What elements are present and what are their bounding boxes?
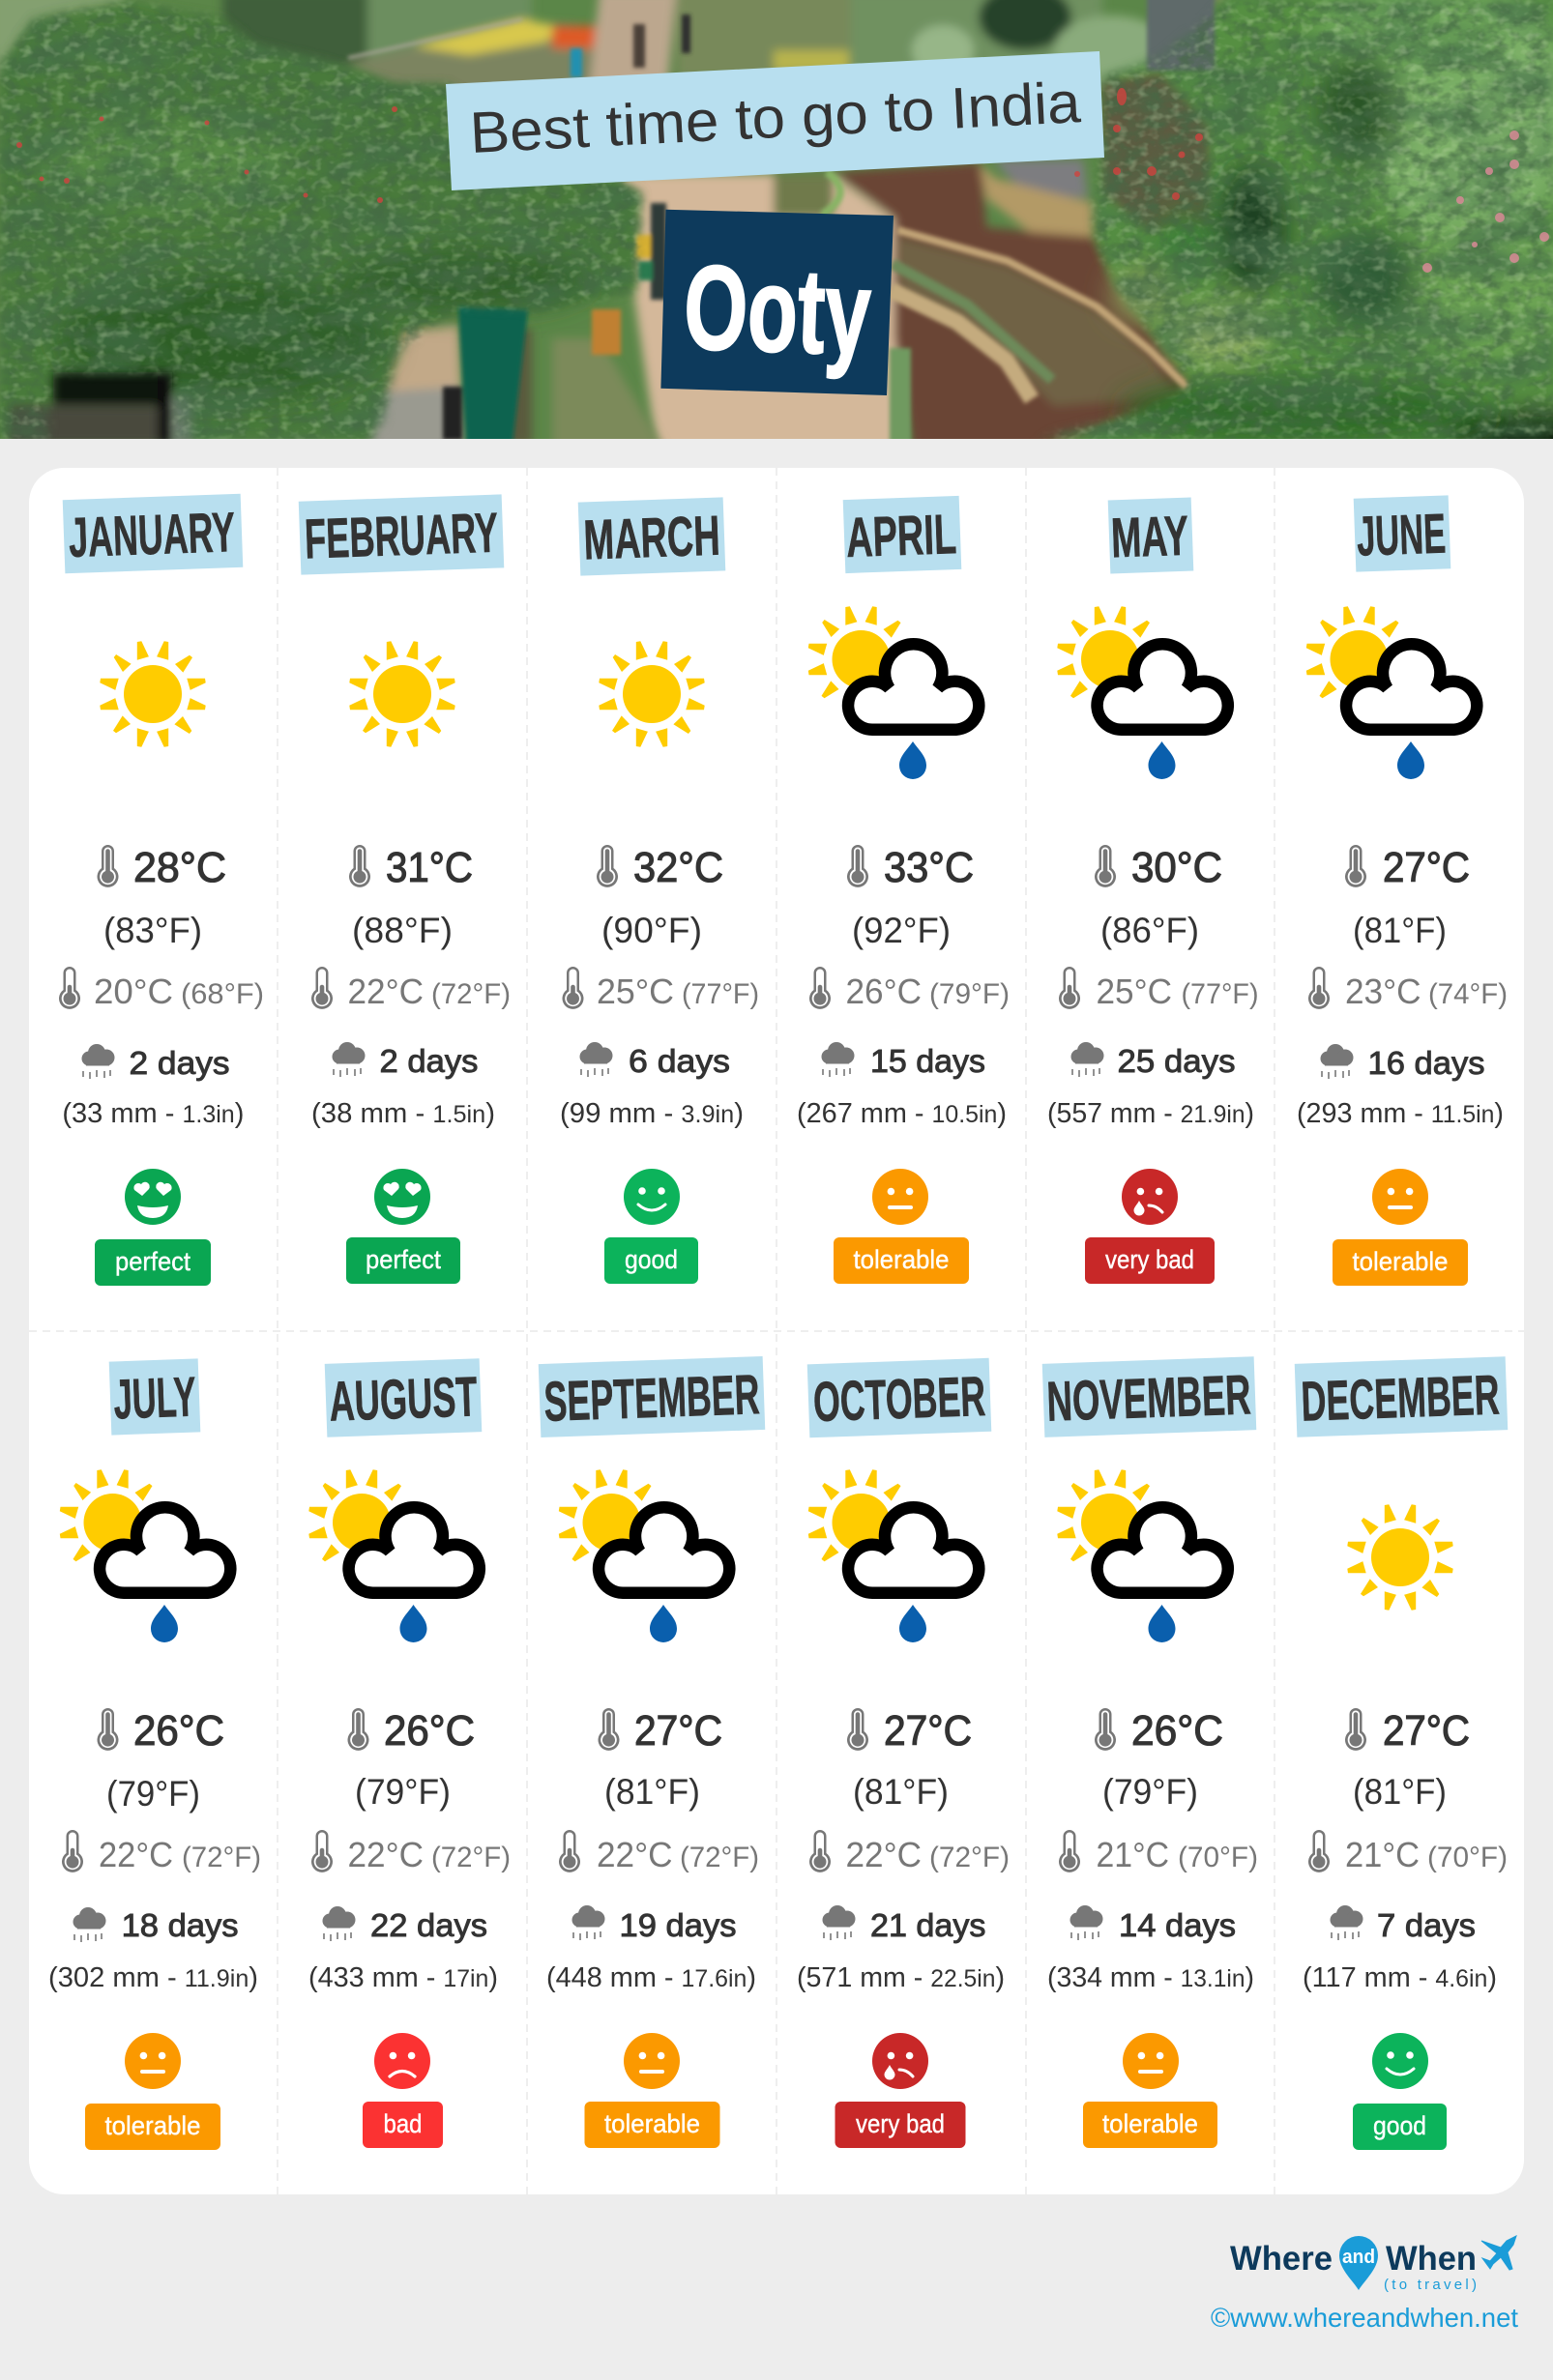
rainfall: (293 mm - 11.5in)	[1297, 1098, 1504, 1129]
rating badge: good	[625, 1245, 678, 1274]
column: February	[299, 494, 511, 1284]
low temperature: 20°C	[94, 972, 173, 1011]
high temperature: 31°C	[386, 844, 473, 891]
month label	[578, 497, 725, 576]
month label	[1042, 1356, 1256, 1437]
low temperature	[559, 1830, 759, 1874]
low temperature: (79°F)	[929, 978, 1010, 1010]
rating badge	[1083, 2102, 1217, 2148]
high temperature	[598, 1707, 722, 1755]
low temperature: (72°F)	[680, 1842, 759, 1873]
month label: SEPTEMBER	[542, 1363, 761, 1434]
rating badge	[1353, 2104, 1447, 2150]
icon: sun, cloud and rain drop	[559, 1469, 729, 1642]
rating face	[125, 1169, 181, 1225]
rainfall: (33 mm - 1.3in)	[62, 1098, 244, 1129]
high temperature: 30°C	[1131, 844, 1222, 891]
rain days	[73, 1907, 239, 1943]
low temperature: 22°C	[348, 1835, 424, 1874]
high temperature	[1095, 844, 1222, 891]
high temperature	[97, 1707, 224, 1755]
rain days	[822, 1905, 986, 1943]
rating face	[1372, 2033, 1428, 2089]
high temperature	[1345, 1707, 1470, 1755]
tagline: (to travel)	[1384, 2277, 1477, 2293]
column: July	[48, 1358, 261, 2150]
high temperature: 33°C	[884, 844, 974, 891]
rating badge	[604, 1237, 698, 1284]
rainfall: (448 mm - 17.6in)	[546, 1962, 756, 1993]
rating face	[872, 2033, 928, 2089]
high temperature: 27°C	[1383, 844, 1470, 891]
rating badge	[346, 1237, 460, 1284]
low temperature: 25°C	[1097, 972, 1172, 1011]
rain days: 14 days	[1119, 1907, 1236, 1943]
column: August	[308, 1358, 511, 2148]
low temperature: 21°C	[1345, 1835, 1420, 1874]
rain days: 16 days	[1367, 1045, 1485, 1081]
rain days	[580, 1042, 730, 1079]
rating badge	[363, 2102, 443, 2148]
month label: JULY	[112, 1366, 197, 1431]
rating badge	[584, 2102, 719, 2148]
high fahrenheit: (86°F)	[1100, 911, 1199, 950]
rainfall: (334 mm - 13.1in)	[1047, 1962, 1254, 1993]
white calendar card	[29, 468, 1524, 2194]
column: January	[59, 494, 264, 1286]
high fahrenheit: (90°F)	[601, 911, 702, 950]
low temperature: (77°F)	[682, 978, 759, 1010]
month label	[1108, 498, 1193, 573]
low temperature	[59, 967, 264, 1011]
rainfall: (571 mm - 22.5in)	[797, 1962, 1005, 1993]
month label: JANUARY	[68, 501, 236, 569]
low temperature: 25°C	[597, 972, 674, 1011]
rating face	[374, 2033, 430, 2089]
rainfall: (267 mm - 10.5in)	[797, 1098, 1007, 1129]
month label: MARCH	[582, 505, 721, 571]
title banner	[446, 51, 1104, 190]
rain days	[81, 1044, 230, 1081]
column: May	[1047, 498, 1259, 1284]
rating badge: tolerable	[604, 2109, 700, 2138]
high temperature: 27°C	[1383, 1707, 1470, 1755]
icon: sun, cloud and rain drop	[1306, 606, 1477, 779]
logo word: Where: Where	[1230, 2240, 1333, 2278]
icon: sun, cloud and rain drop	[1057, 1469, 1228, 1642]
high temperature: 27°C	[884, 1707, 972, 1755]
icon: sun, cloud and rain drop	[308, 1469, 480, 1642]
column: June	[1297, 495, 1508, 1286]
low temperature	[311, 1830, 511, 1874]
rating badge	[85, 2104, 220, 2150]
rating badge	[1085, 1237, 1215, 1284]
low temperature: (72°F)	[431, 978, 511, 1010]
rating badge	[834, 1237, 969, 1284]
column: September	[539, 1356, 765, 2148]
rain days: 22 days	[370, 1907, 487, 1943]
rating face	[1372, 1169, 1428, 1225]
column: October	[797, 1358, 1010, 2148]
month label	[299, 494, 504, 575]
rain days: 21 days	[870, 1907, 986, 1943]
rain days	[323, 1906, 487, 1943]
low temperature: 22°C	[597, 1835, 673, 1874]
rating face	[872, 1169, 928, 1225]
high fahrenheit: (81°F)	[1353, 1772, 1447, 1812]
low temperature: (74°F)	[1428, 978, 1508, 1010]
high temperature: 32°C	[633, 844, 723, 891]
icon: sun, cloud and rain drop	[1057, 606, 1228, 779]
rain days	[1071, 1042, 1236, 1079]
rain days: 18 days	[122, 1907, 239, 1943]
column: April	[797, 496, 1010, 1284]
month label	[1354, 495, 1450, 572]
rain days: 2 days	[379, 1043, 478, 1079]
high temperature	[348, 1707, 475, 1755]
low temperature	[809, 967, 1010, 1011]
rain days	[1331, 1905, 1476, 1943]
rainfall: (38 mm - 1.5in)	[311, 1098, 495, 1129]
rating face	[624, 1169, 680, 1225]
low temperature: 22°C	[348, 972, 424, 1011]
column: December	[1295, 1356, 1508, 2150]
rating badge: bad	[383, 2109, 422, 2138]
rating badge: good	[1373, 2111, 1426, 2140]
month label: APRIL	[845, 503, 957, 569]
rain days	[822, 1042, 985, 1079]
low temperature: (72°F)	[431, 1842, 511, 1873]
high fahrenheit: (83°F)	[103, 911, 202, 950]
icon: sun	[349, 641, 455, 747]
destination banner: Ooty: Ooty	[682, 241, 873, 381]
rating badge: perfect	[115, 1247, 190, 1276]
rating badge: tolerable	[104, 2111, 201, 2140]
rating face	[125, 2033, 181, 2089]
rain days: 15 days	[870, 1043, 985, 1079]
low temperature: (72°F)	[182, 1842, 261, 1873]
icon: sun, cloud and rain drop	[60, 1469, 230, 1642]
high temperature	[847, 844, 974, 891]
rating badge: tolerable	[853, 1245, 950, 1274]
rain days: 25 days	[1118, 1043, 1236, 1079]
high temperature	[597, 844, 723, 891]
icon: sun	[1347, 1504, 1453, 1611]
icon: map pin with and: and	[1342, 2247, 1375, 2268]
rating badge: very bad	[1105, 1245, 1194, 1274]
month label	[539, 1356, 765, 1437]
rain days: 19 days	[619, 1907, 737, 1943]
low temperature	[1059, 1830, 1258, 1874]
logo: Where and When to travel	[1211, 2236, 1518, 2333]
rating badge	[1333, 1239, 1468, 1286]
low temperature	[1308, 1830, 1508, 1874]
rating face	[1123, 2033, 1179, 2089]
month label: FEBRUARY	[304, 502, 499, 571]
rating badge: tolerable	[1102, 2109, 1198, 2138]
high fahrenheit: (79°F)	[355, 1772, 451, 1812]
high temperature: 27°C	[634, 1707, 722, 1755]
logo word: When: When	[1386, 2240, 1477, 2278]
icon: sun, cloud and rain drop	[808, 606, 979, 779]
high fahrenheit: (92°F)	[852, 911, 951, 950]
rainfall: (557 mm - 21.9in)	[1047, 1098, 1254, 1129]
low temperature: (68°F)	[181, 978, 264, 1010]
month label: OCTOBER	[812, 1365, 986, 1434]
rainfall: (302 mm - 11.9in)	[48, 1962, 258, 1993]
month label: NOVEMBER	[1045, 1363, 1252, 1434]
rainfall: (117 mm - 4.6in)	[1303, 1962, 1497, 1993]
rating badge	[835, 2102, 965, 2148]
icon: airplane	[1481, 2236, 1516, 2270]
low temperature	[1059, 967, 1259, 1011]
month label	[109, 1358, 200, 1436]
destination banner: Ooty	[660, 210, 894, 395]
high fahrenheit: (79°F)	[106, 1774, 200, 1814]
month label: JUNE	[1356, 502, 1447, 568]
month label	[807, 1358, 991, 1437]
rain days: 2 days	[130, 1045, 230, 1081]
icon: sun, cloud and rain drop	[808, 1469, 979, 1642]
column: March	[560, 497, 759, 1284]
high temperature: 26°C	[384, 1707, 475, 1755]
rain days	[572, 1905, 737, 1943]
high temperature	[847, 1707, 972, 1755]
rating face	[624, 2033, 680, 2089]
rating badge: very bad	[856, 2109, 945, 2138]
low temperature: 23°C	[1345, 972, 1421, 1011]
high temperature: 26°C	[133, 1707, 224, 1755]
low temperature: (72°F)	[929, 1842, 1010, 1873]
rain days	[1321, 1044, 1485, 1081]
high fahrenheit: (79°F)	[1102, 1772, 1198, 1812]
low temperature: 21°C	[1097, 1835, 1169, 1874]
low temperature: 22°C	[845, 1835, 922, 1874]
rating badge: tolerable	[1352, 1247, 1449, 1276]
rainfall: (99 mm - 3.9in)	[560, 1098, 744, 1129]
icon: sun	[599, 641, 705, 747]
high temperature	[1345, 844, 1470, 891]
high temperature	[1095, 1707, 1223, 1755]
low temperature	[809, 1830, 1010, 1874]
low temperature: (70°F)	[1178, 1842, 1258, 1873]
month label: MAY	[1110, 505, 1189, 569]
month label	[843, 496, 961, 573]
rain days	[333, 1042, 478, 1079]
high temperature: 26°C	[1131, 1707, 1223, 1755]
low temperature	[62, 1830, 261, 1874]
title banner: Best time to go to India	[468, 70, 1082, 165]
low temperature	[311, 967, 511, 1011]
month label	[63, 494, 243, 573]
icon: sun	[100, 641, 206, 747]
rating badge: perfect	[366, 1245, 441, 1274]
high temperature: 28°C	[133, 844, 226, 891]
rainfall: (433 mm - 17in)	[308, 1962, 498, 1993]
column: November	[1042, 1356, 1258, 2148]
high fahrenheit: (81°F)	[1353, 911, 1447, 950]
high fahrenheit: (81°F)	[604, 1772, 700, 1812]
rating badge	[95, 1239, 211, 1286]
low temperature: (77°F)	[1182, 978, 1259, 1010]
low temperature: (70°F)	[1427, 1842, 1508, 1873]
rain days	[1070, 1905, 1236, 1943]
high fahrenheit: (88°F)	[352, 911, 453, 950]
month label: AUGUST	[328, 1365, 479, 1434]
low temperature	[1308, 967, 1508, 1011]
website: ©www.whereandwhen.net	[1211, 2303, 1518, 2333]
low temperature: 22°C	[99, 1835, 173, 1874]
month label	[325, 1358, 482, 1437]
rain days: 7 days	[1377, 1907, 1476, 1943]
rating face	[374, 1169, 430, 1225]
low temperature	[563, 967, 759, 1011]
rating face	[1122, 1169, 1178, 1225]
high fahrenheit: (81°F)	[853, 1772, 949, 1812]
icon: map pin with and	[1339, 2236, 1378, 2290]
low temperature: 26°C	[845, 972, 922, 1011]
high temperature	[349, 844, 473, 891]
hero photo: Ooty gardens	[0, 0, 1553, 463]
rain days: 6 days	[629, 1043, 730, 1079]
